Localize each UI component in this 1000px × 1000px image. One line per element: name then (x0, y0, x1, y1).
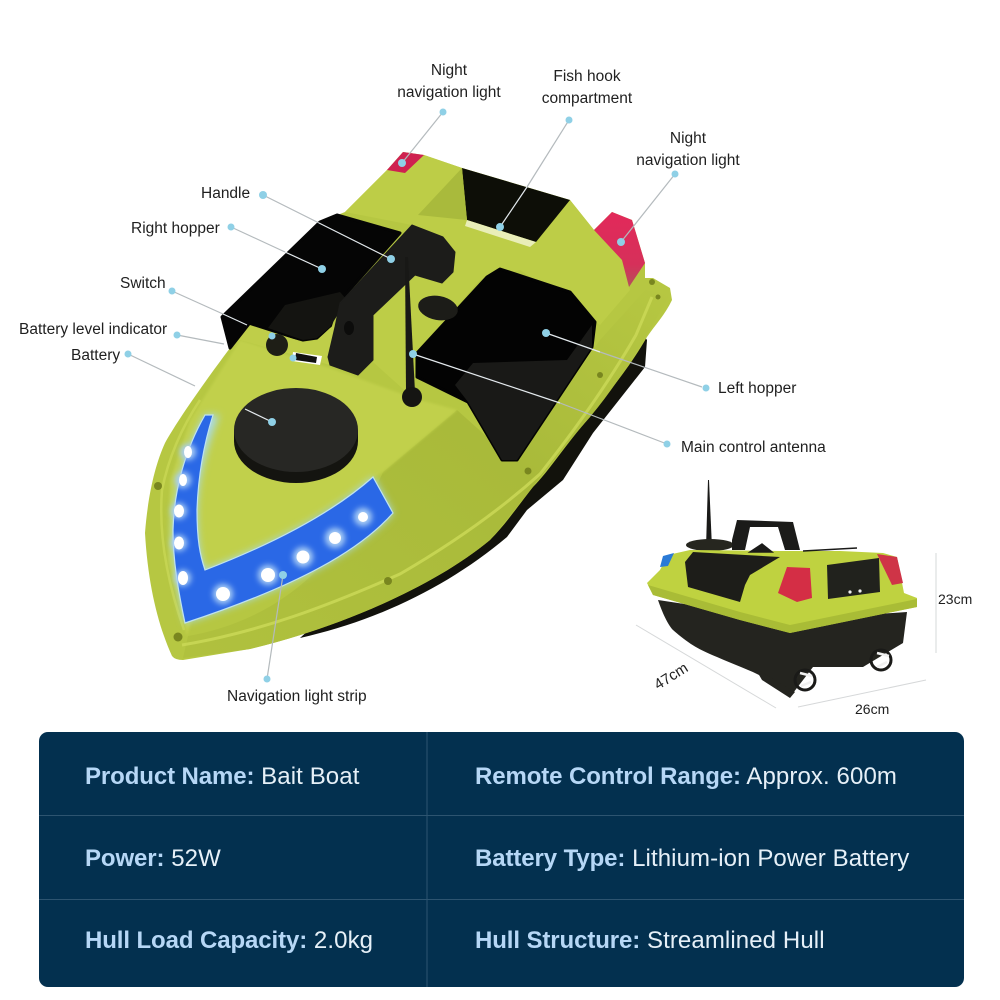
callout labels: Battery level indicator (19, 321, 167, 338)
callout labels: Handle (201, 185, 250, 202)
spec: battery type: Battery Type: Lithium-ion Power Battery (475, 845, 909, 872)
battery label (292, 352, 322, 365)
spec: load capacity: Hull Load Capacity: 2.0kg (85, 927, 373, 954)
black lower hull (300, 330, 647, 638)
hull side shading (183, 290, 670, 658)
spec: product name: Product Name: Bait Boat (85, 763, 360, 790)
green hull (145, 152, 672, 660)
deck in front of right hopper (232, 320, 341, 365)
specification table (39, 732, 964, 987)
table background (39, 732, 964, 987)
rear deck (345, 155, 630, 398)
handle (328, 225, 455, 375)
spec: power: Power: 52W (85, 845, 221, 872)
hull rim (182, 297, 652, 645)
callout labels: Night (431, 62, 468, 79)
dimension labels: 23cm (938, 591, 972, 607)
knob (416, 293, 460, 323)
callout labels: compartment (542, 90, 633, 107)
callout labels: Navigation light strip (227, 688, 367, 705)
blue badge (660, 553, 674, 567)
callout labels: Switch (120, 275, 166, 292)
handle (732, 520, 800, 550)
callout labels: Main control antenna (681, 439, 826, 456)
callout labels: Fish hook (553, 68, 621, 85)
switch (266, 334, 288, 356)
callout labels: Right hopper (131, 220, 220, 237)
callout lines and dots (124, 108, 710, 682)
hull (658, 600, 907, 697)
wire and knob (750, 544, 857, 552)
screws (154, 279, 660, 642)
disc (234, 388, 358, 483)
small boat with dimensions (636, 480, 972, 717)
small hopper (685, 552, 780, 602)
navigation light strip (171, 415, 393, 623)
right hopper (222, 215, 400, 348)
raised front deck (168, 340, 457, 636)
propellers (755, 650, 891, 698)
callout labels: Night (670, 130, 707, 147)
antenna (405, 257, 415, 392)
left hopper (417, 269, 595, 460)
dimension lines (636, 553, 936, 708)
spec: hull structure: Hull Structure: Streamlined Hull (475, 927, 825, 954)
antenna (706, 480, 712, 548)
small boat with dimensions: 47cm (651, 660, 691, 693)
night lights (387, 152, 645, 287)
callout labels: navigation light (636, 152, 740, 169)
green deck (647, 550, 917, 633)
callout labels: Left hopper (718, 380, 796, 397)
spec: remote range: Remote Control Range: Approx. 600m (475, 763, 897, 790)
callout labels: navigation light (397, 84, 501, 101)
callout labels (19, 62, 826, 705)
callout labels: Battery (71, 347, 120, 364)
small boat with dimensions: 26cm (855, 701, 889, 717)
rear panel (827, 558, 880, 599)
main boat illustration (145, 152, 672, 660)
red lights (778, 567, 812, 602)
disc behind antenna (686, 539, 734, 551)
fish hook compartment (462, 168, 570, 242)
